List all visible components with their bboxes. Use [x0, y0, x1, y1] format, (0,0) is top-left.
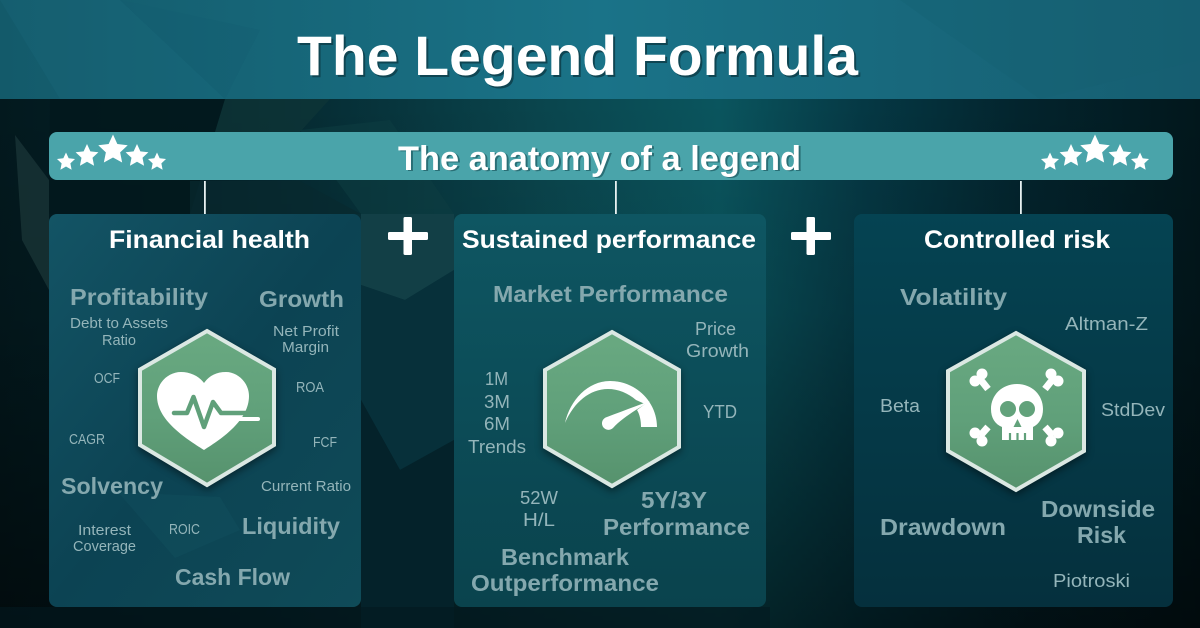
icon: gauge hexagon: [545, 332, 679, 486]
metric labels: financial health: ROA: [296, 379, 324, 396]
metric labels: sustained performance: Market Performance: [493, 281, 728, 307]
metric labels: sustained performance: Outperformance: [471, 570, 659, 596]
metric labels: sustained performance: [468, 281, 750, 596]
metric labels: sustained performance: Growth: [686, 341, 749, 361]
heading: controlled risk: Controlled risk: [924, 226, 1110, 254]
metric labels: financial health: Interest: [78, 522, 132, 539]
metric labels: financial health: OCF: [94, 370, 120, 387]
metric labels: controlled risk: Beta: [880, 396, 921, 416]
metric labels: financial health: [61, 284, 351, 590]
icon: heart hexagon: [140, 331, 274, 485]
metric labels: controlled risk: Risk: [1077, 522, 1126, 548]
metric labels: sustained performance: 1M: [485, 369, 508, 389]
metric labels: sustained performance: 3M: [484, 392, 510, 412]
metric labels: controlled risk: Altman-Z: [1065, 314, 1148, 334]
metric labels: financial health: Net Profit: [273, 323, 340, 340]
metric labels: financial health: Liquidity: [242, 513, 340, 539]
metric labels: sustained performance: YTD: [703, 402, 737, 422]
metric labels: financial health: ROIC: [169, 521, 200, 538]
metric labels: financial health: Ratio: [102, 332, 136, 349]
panel: controlled risk: [854, 214, 1173, 607]
icon: left stars: [57, 134, 166, 170]
plus sign right: [791, 217, 831, 255]
metric labels: financial health: FCF: [313, 434, 337, 451]
metric labels: sustained performance: 5Y/3Y: [641, 487, 707, 513]
banner heading: The anatomy of a legend: [400, 141, 803, 179]
title: The Legend Formula: [297, 24, 859, 87]
banner: [49, 132, 1173, 180]
metric labels: financial health: Debt to Assets: [70, 315, 168, 332]
metric labels: controlled risk: Drawdown: [880, 514, 1006, 540]
metric labels: sustained performance: Performance: [603, 514, 750, 540]
icon: skull hexagon: [948, 333, 1084, 490]
plus sign left: [388, 217, 428, 255]
banner heading: The anatomy of a legend: [398, 140, 801, 178]
metric labels: financial health: Margin: [282, 339, 329, 356]
header band: [0, 0, 1200, 99]
icon: right stars: [1041, 134, 1149, 170]
metric labels: sustained performance: 6M: [484, 414, 510, 434]
title: The Legend Formula: [299, 26, 861, 89]
heading: financial health: Financial health: [109, 226, 310, 254]
metric labels: financial health: Cash Flow: [175, 564, 290, 590]
metric labels: controlled risk: Piotroski: [1053, 571, 1130, 591]
metric labels: financial health: Solvency: [61, 473, 163, 499]
metric labels: controlled risk: Downside: [1041, 496, 1155, 522]
metric labels: sustained performance: Trends: [468, 437, 526, 457]
metric labels: controlled risk: [880, 284, 1165, 591]
metric labels: controlled risk: StdDev: [1101, 400, 1165, 420]
metric labels: sustained performance: Price: [695, 319, 736, 339]
metric labels: sustained performance: H/L: [523, 510, 555, 530]
metric labels: financial health: Current Ratio: [261, 478, 351, 495]
heading: sustained performance: Sustained performance: [462, 226, 756, 254]
connector lines: [204, 181, 1022, 214]
metric labels: financial health: CAGR: [69, 431, 105, 448]
panel: sustained performance: [454, 214, 766, 607]
panel: financial health: [49, 214, 361, 607]
metric labels: controlled risk: Volatility: [900, 284, 1007, 310]
metric labels: financial health: Profitability: [70, 284, 208, 310]
metric labels: sustained performance: Benchmark: [501, 544, 629, 570]
metric labels: financial health: Growth: [259, 286, 344, 312]
metric labels: sustained performance: 52W: [520, 488, 558, 508]
metric labels: financial health: Coverage: [73, 538, 136, 555]
